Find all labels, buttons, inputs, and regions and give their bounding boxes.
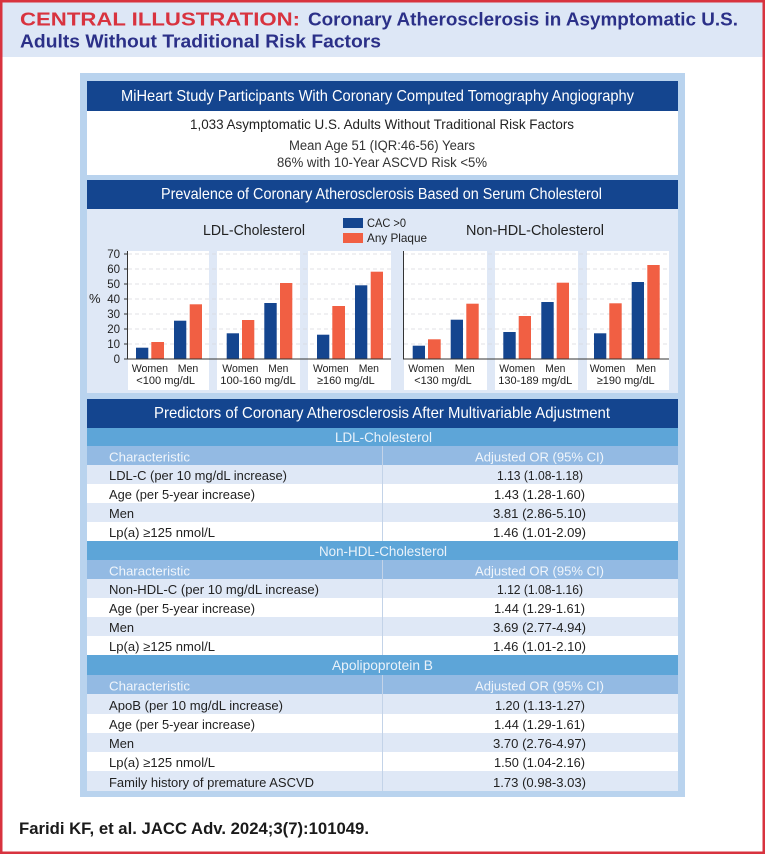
bar chart: non-HDL-cholesterol: 130-189 mg/dL xyxy=(498,375,572,387)
bar chart: LDL-cholesterol: Men xyxy=(359,363,379,375)
bar chart: non-HDL-cholesterol: Women xyxy=(590,363,625,375)
prevalence panel xyxy=(87,180,678,393)
title banner: CENTRAL ILLUSTRATION: xyxy=(20,10,300,30)
bar chart: LDL-cholesterol: Men xyxy=(178,363,198,375)
table section: apolipoprotein B: Apolipoprotein B xyxy=(332,658,433,673)
table section: non-HDL-cholesterol: Men xyxy=(109,620,134,635)
bar chart: LDL-cholesterol: 10 xyxy=(107,339,120,351)
table section: apolipoprotein B: ApoB (per 10 mg/dL increase) xyxy=(109,698,283,713)
table section: LDL-cholesterol xyxy=(87,428,678,541)
table section: apolipoprotein B: 1.50 (1.04-2.16) xyxy=(494,755,585,770)
bar chart: non-HDL-cholesterol: Men xyxy=(545,363,565,375)
table section: non-HDL-cholesterol: Characteristic xyxy=(109,564,191,578)
table section: apolipoprotein B: Age (per 5-year increase) xyxy=(109,717,255,732)
bar chart: LDL-cholesterol: Women xyxy=(132,363,168,375)
table section: apolipoprotein B: Characteristic xyxy=(109,678,191,694)
table section: non-HDL-cholesterol: 1.44 (1.29-1.61) xyxy=(494,601,585,616)
table section: LDL-cholesterol: 1.46 (1.01-2.09) xyxy=(493,525,586,540)
table section: non-HDL-cholesterol: 1.12 (1.08-1.16) xyxy=(497,582,583,597)
bar chart: LDL-cholesterol: 30 xyxy=(107,309,120,321)
table section: LDL-cholesterol: Adjusted OR (95% CI) xyxy=(475,450,604,464)
bar chart: non-HDL-cholesterol xyxy=(403,251,669,390)
table section: non-HDL-cholesterol: Adjusted OR (95% CI) xyxy=(475,564,604,578)
study participants panel xyxy=(87,81,678,175)
table section: apolipoprotein B: Adjusted OR (95% CI) xyxy=(475,678,604,694)
table section: non-HDL-cholesterol: 3.69 (2.77-4.94) xyxy=(493,620,586,635)
bar chart: LDL-cholesterol: Women xyxy=(222,363,258,375)
bar chart: non-HDL-cholesterol: <130 mg/dL xyxy=(414,375,472,387)
bar chart: LDL-cholesterol: 0 xyxy=(114,354,120,366)
table section: non-HDL-cholesterol xyxy=(87,541,678,655)
table section: apolipoprotein B: 3.70 (2.76-4.97) xyxy=(493,736,586,751)
table section: LDL-cholesterol: 3.81 (2.86-5.10) xyxy=(493,506,586,521)
bar chart: LDL-cholesterol: Men xyxy=(268,363,288,375)
predictors table xyxy=(87,399,678,791)
study participants panel: MiHeart Study Participants With Coronary Computed Tomography Angiography xyxy=(121,88,634,105)
table section: LDL-cholesterol: LDL-C (per 10 mg/dL increase) xyxy=(109,468,287,483)
prevalence panel: LDL-Cholesterol xyxy=(203,222,305,239)
table section: non-HDL-cholesterol: 1.46 (1.01-2.10) xyxy=(493,639,586,654)
table section: apolipoprotein B: Lp(a) ≥125 nmol/L xyxy=(109,755,215,770)
table section: LDL-cholesterol: Lp(a) ≥125 nmol/L xyxy=(109,525,215,540)
bar chart: non-HDL-cholesterol: Women xyxy=(499,363,535,375)
table section: apolipoprotein B: 1.73 (0.98-3.03) xyxy=(493,775,586,790)
predictors table: Predictors of Coronary Atherosclerosis After Multivariable Adjustment xyxy=(154,405,611,422)
citation: Faridi KF, et al. JACC Adv. 2024;3(7):101049. xyxy=(19,819,369,838)
table section: LDL-cholesterol: 1.13 (1.08-1.18) xyxy=(497,468,583,483)
bar chart: non-HDL-cholesterol: Women xyxy=(408,363,444,375)
bar chart: non-HDL-cholesterol: Men xyxy=(455,363,475,375)
table section: non-HDL-cholesterol: Lp(a) ≥125 nmol/L xyxy=(109,639,215,654)
table section: LDL-cholesterol: Characteristic xyxy=(109,450,191,464)
prevalence panel: Prevalence of Coronary Atherosclerosis Based on Serum Cholesterol xyxy=(161,186,602,203)
study participants panel: 86% with 10-Year ASCVD Risk <5% xyxy=(277,155,487,170)
table section: non-HDL-cholesterol: Non-HDL-C (per 10 mg/dL increase) xyxy=(109,582,319,597)
bar chart: LDL-cholesterol: 60 xyxy=(107,264,120,276)
bar chart: LDL-cholesterol: 20 xyxy=(107,324,120,336)
study participants panel: 1,033 Asymptomatic U.S. Adults Without Traditional Risk Factors xyxy=(190,116,574,132)
title banner xyxy=(2,2,763,57)
bar chart: LDL-cholesterol: 70 xyxy=(107,249,120,261)
table section: LDL-cholesterol: 1.43 (1.28-1.60) xyxy=(494,487,585,502)
title banner: Coronary Atherosclerosis in Asymptomatic U.S. xyxy=(308,10,738,30)
table section: apolipoprotein B: 1.20 (1.13-1.27) xyxy=(495,698,585,713)
bar chart: LDL-cholesterol: <100 mg/dL xyxy=(136,375,195,387)
table section: non-HDL-cholesterol: Age (per 5-year increase) xyxy=(109,601,255,616)
bar chart: non-HDL-cholesterol: ≥190 mg/dL xyxy=(597,375,655,387)
prevalence panel: Non-HDL-Cholesterol xyxy=(466,222,604,239)
table section: LDL-cholesterol: Age (per 5-year increase) xyxy=(109,487,255,502)
table section: non-HDL-cholesterol: Non-HDL-Cholesterol xyxy=(319,544,447,559)
table section: apolipoprotein B: Family history of premature ASCVD xyxy=(109,775,314,790)
main panel xyxy=(80,73,685,797)
table section: apolipoprotein B: Men xyxy=(109,736,134,751)
legend: Any Plaque xyxy=(367,231,427,245)
study participants panel: Mean Age 51 (IQR:46-56) Years xyxy=(289,138,475,153)
bar chart: LDL-cholesterol: % xyxy=(89,291,101,306)
legend: CAC >0 xyxy=(367,216,406,230)
bar chart: LDL-cholesterol: 40 xyxy=(107,294,120,306)
title banner: Adults Without Traditional Risk Factors xyxy=(20,32,381,52)
table section: LDL-cholesterol: LDL-Cholesterol xyxy=(335,430,432,445)
bar chart: LDL-cholesterol: 100-160 mg/dL xyxy=(220,375,296,387)
bar chart: non-HDL-cholesterol: Men xyxy=(636,363,656,375)
bar chart: LDL-cholesterol: Women xyxy=(313,363,349,375)
bar chart: LDL-cholesterol xyxy=(89,249,391,390)
table section: apolipoprotein B: 1.44 (1.29-1.61) xyxy=(494,717,585,732)
bar chart: LDL-cholesterol: 50 xyxy=(107,279,120,291)
table section: LDL-cholesterol: Men xyxy=(109,506,134,521)
table section: apolipoprotein B xyxy=(87,655,678,791)
bar chart: LDL-cholesterol: ≥160 mg/dL xyxy=(317,375,375,387)
legend xyxy=(343,216,427,245)
